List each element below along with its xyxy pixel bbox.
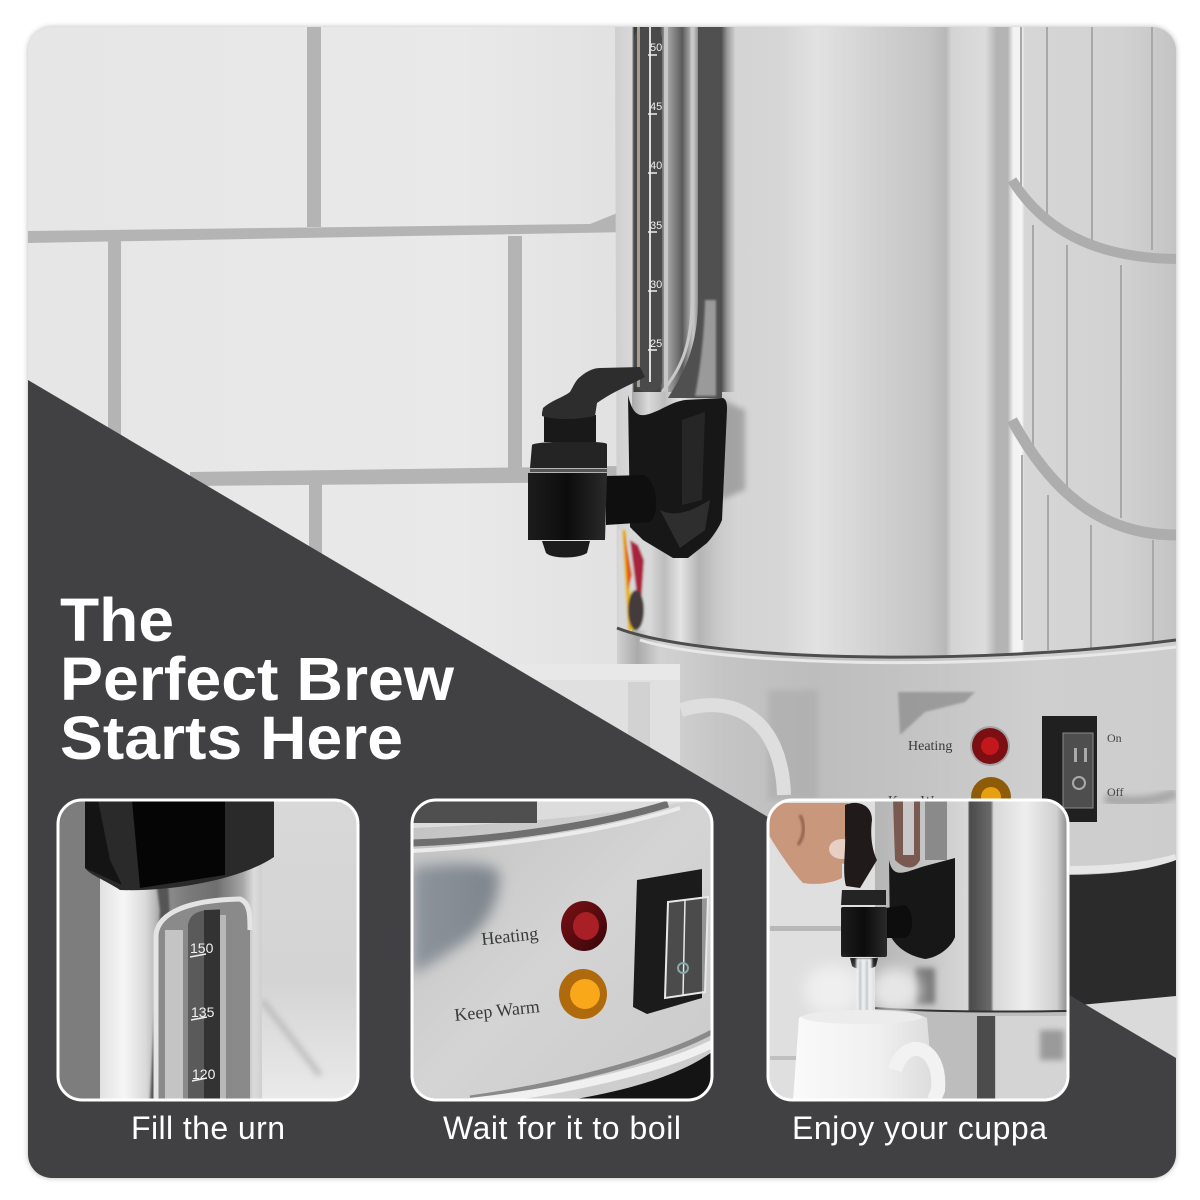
tap handle lever: [542, 367, 645, 419]
mug: [793, 1010, 938, 1100]
caption: wait for it to boil: Wait for it to boil: [443, 1110, 681, 1146]
keep warm light: [971, 777, 1011, 798]
tap bracket shadow: [720, 400, 745, 500]
gauge tube: 30: [650, 279, 662, 291]
inset labels: Heating: [480, 923, 539, 949]
gauge tube: [634, 27, 722, 398]
bracket: [889, 858, 955, 959]
on label: On: [1107, 731, 1122, 745]
heading: Perfect Brew: [60, 645, 455, 713]
hand: [768, 803, 857, 884]
heating led: [561, 901, 607, 951]
tap spout pipe: [606, 475, 656, 525]
reflection on lower body: [898, 692, 975, 735]
water: [856, 958, 872, 1030]
gauge tube: 25: [650, 338, 662, 350]
mug in main photo: [515, 664, 791, 796]
heating light: [970, 726, 1010, 766]
lever: [844, 803, 877, 888]
heading: The: [60, 586, 174, 654]
urn upper body: [615, 27, 1176, 657]
card background wall tiles: [28, 27, 648, 667]
dark diagonal panel: [28, 380, 1176, 1178]
heating label: Heating: [908, 739, 952, 754]
off label: Off: [1107, 785, 1123, 799]
keep warm label partial: Keep Warm: [888, 794, 955, 809]
caption: fill the urn: Fill the urn: [131, 1110, 285, 1146]
inset: wait for it to boil: [412, 800, 712, 1102]
colourful reflection: [621, 528, 645, 632]
marble counter: [1086, 996, 1176, 1057]
power switch: [1042, 716, 1097, 822]
gauge tube: 45: [650, 101, 662, 113]
steam: [804, 965, 860, 1015]
gauge tube: 50: [650, 42, 662, 54]
gauge tube: 35: [650, 220, 662, 232]
rocker switch: [633, 869, 708, 1014]
urn reflected tile lines: [1012, 27, 1176, 650]
tap bracket: [628, 395, 727, 558]
tap assembly: [528, 367, 745, 558]
chrome below gauge: [632, 392, 740, 650]
inset: fill the urn: 135: [191, 1004, 215, 1020]
inset: enjoy your cuppa: [768, 800, 1068, 1100]
inset: fill the urn: 150: [190, 940, 214, 956]
heading: [60, 596, 454, 760]
urn lower body: [515, 628, 1176, 1060]
black base: [1069, 860, 1176, 1006]
valve: [841, 890, 887, 969]
caption: enjoy your cuppa: Enjoy your cuppa: [792, 1110, 1047, 1146]
inset: fill the urn: 120: [192, 1066, 216, 1082]
keep warm led: [559, 969, 607, 1019]
inset: fill the urn: [58, 800, 358, 1100]
tap valve: [528, 415, 607, 558]
heading: Starts Here: [60, 704, 403, 772]
keep warm text: Keep Warm: [453, 996, 541, 1025]
black lid: [85, 800, 274, 890]
gauge tube: 40: [650, 160, 662, 172]
